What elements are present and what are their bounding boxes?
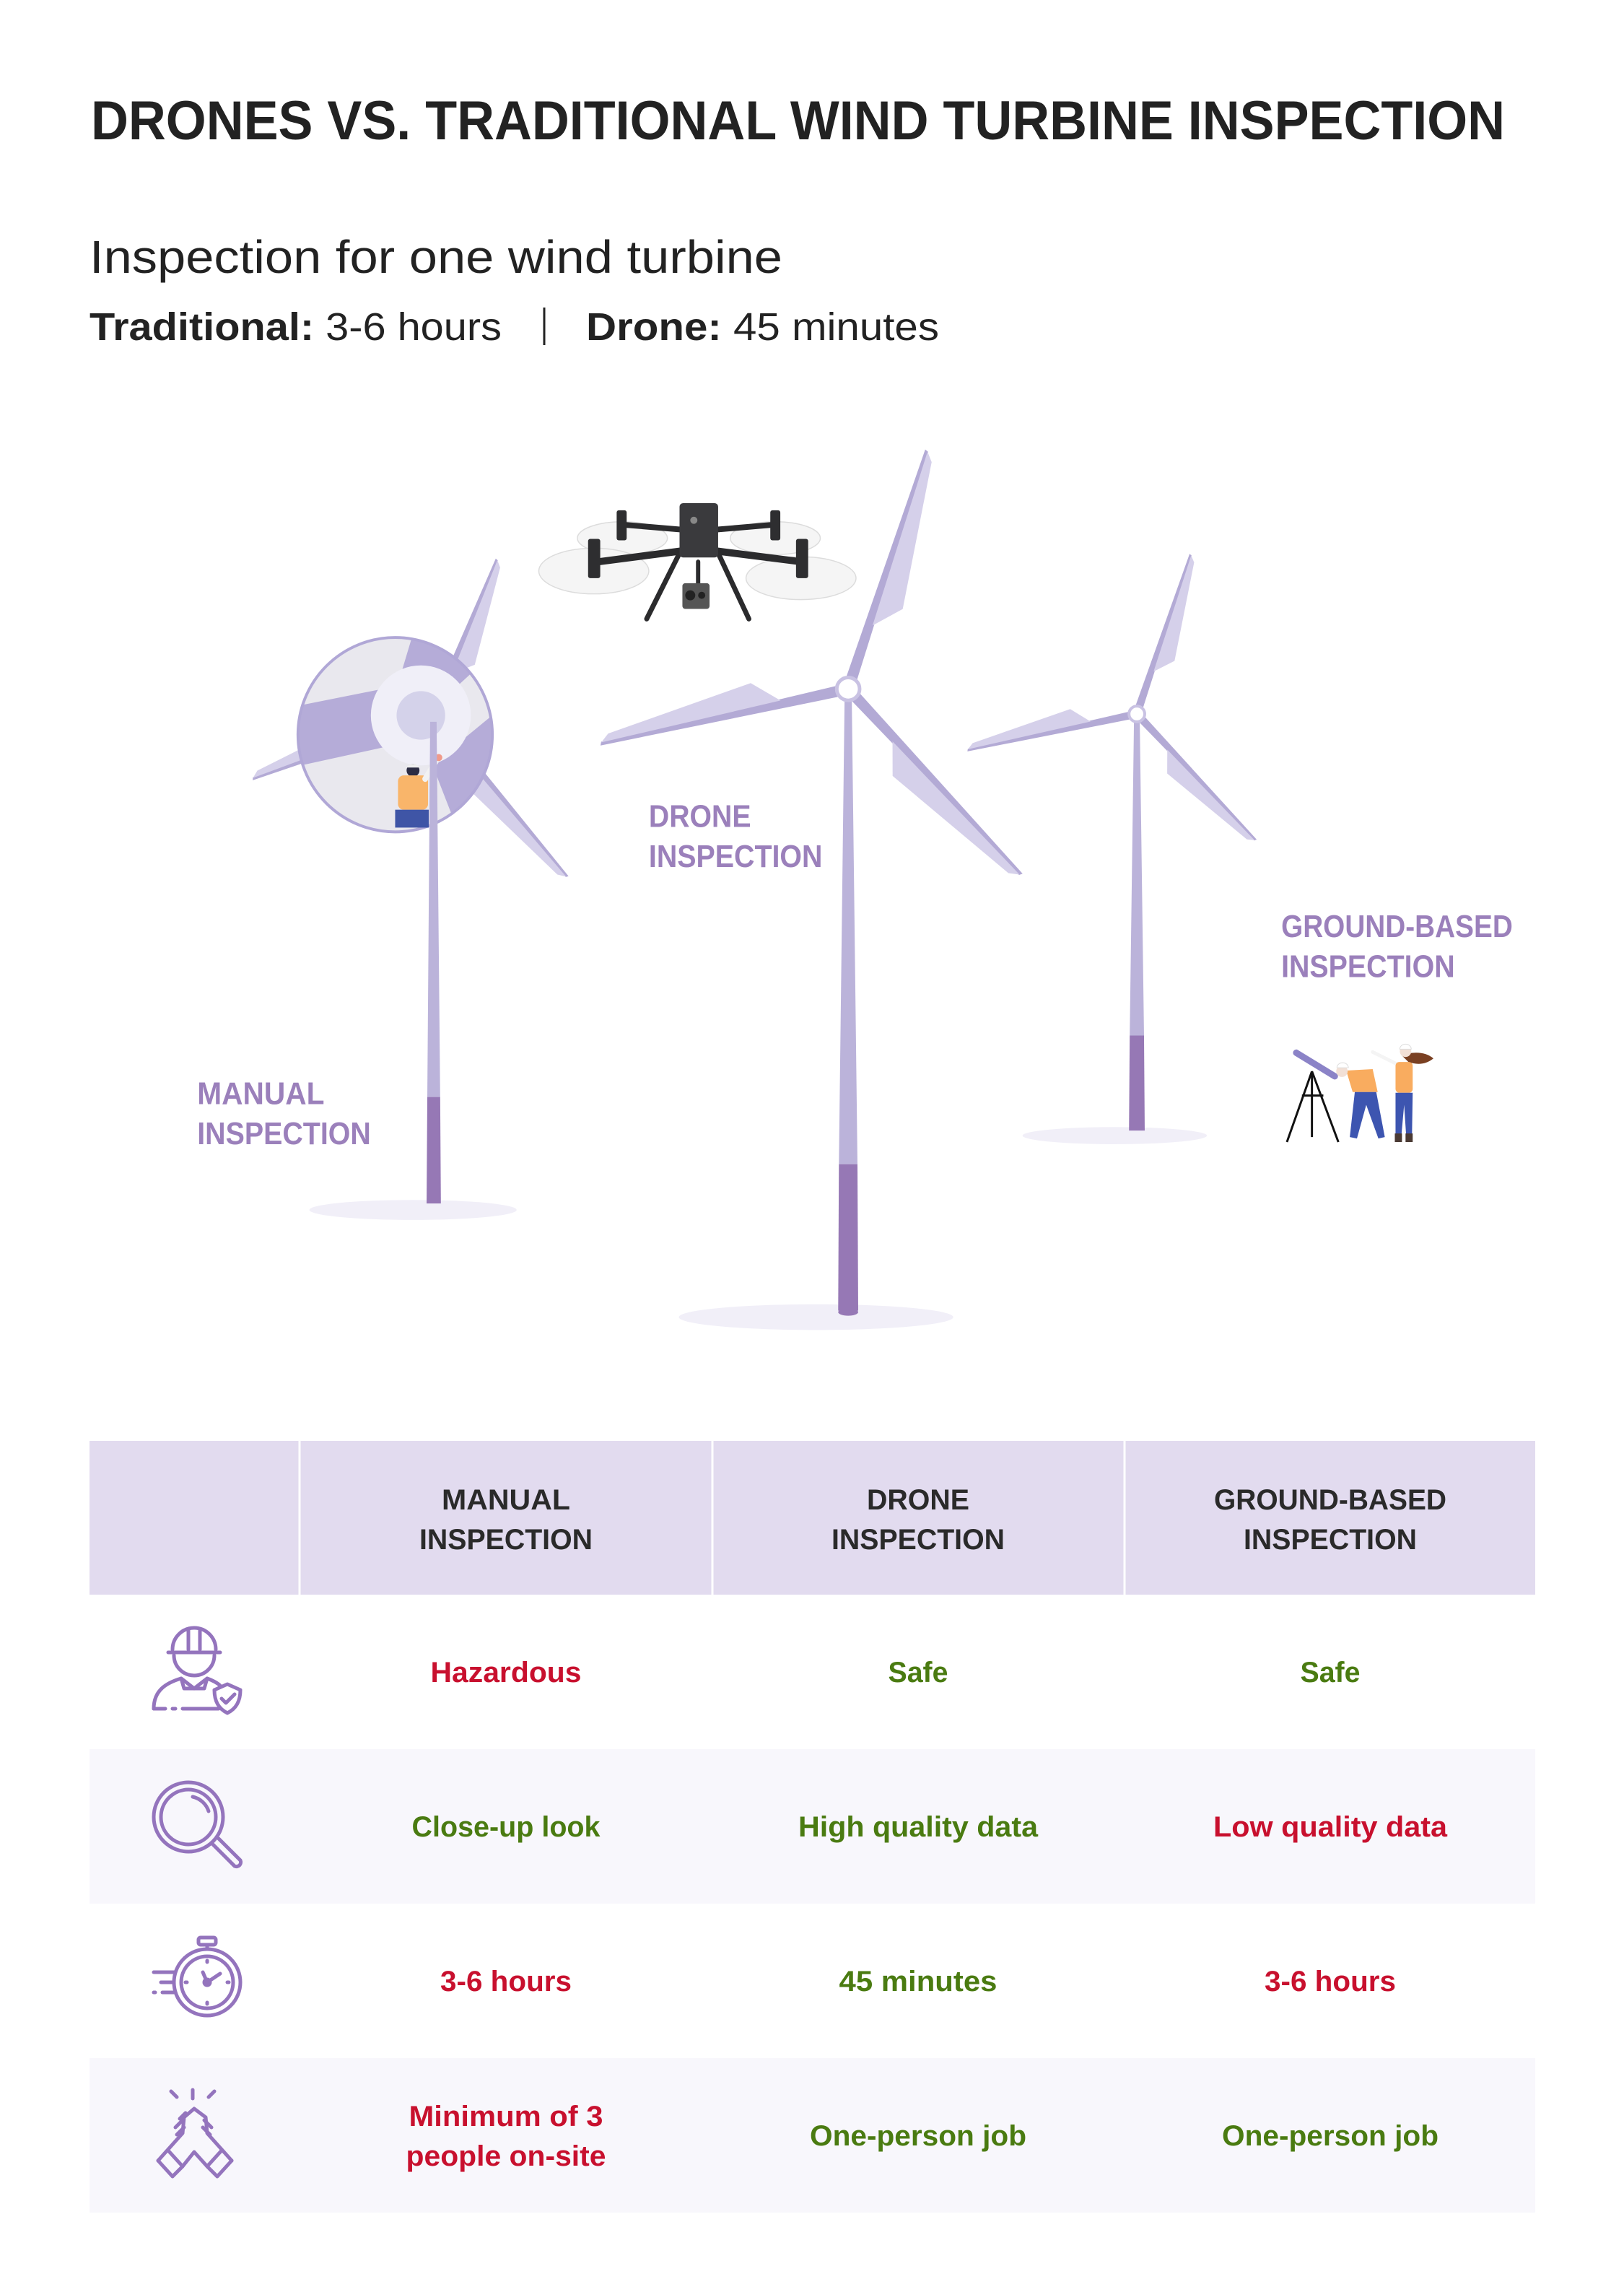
label: drone inspection: INSPECTION [649,840,822,874]
table header: GROUND-BASED [1214,1484,1446,1516]
turbine: drone inspection (middle) [595,448,1026,1316]
row: personnel: Minimum of 3 [409,2101,603,2132]
row: time: 45 minutes [839,1966,997,1997]
time comparison line [90,305,939,349]
label: ground-based inspection: GROUND-BASED [1281,910,1513,944]
row: personnel: One-person job [1222,2120,1439,2152]
row: safety [430,1657,1360,1689]
turbine: ground-based (right) [964,553,1260,1130]
row: data quality: Low quality data [1213,1811,1448,1843]
ground-based inspectors with telescope [1287,1044,1433,1142]
turbine: manual (left) with magnifier [245,557,572,1203]
table header: MANUAL [442,1484,570,1516]
label: ground-based inspection: INSPECTION [1281,949,1455,984]
row: time: 3-6 hours [1265,1966,1396,1997]
row: time [440,1966,1396,1997]
table header: INSPECTION [419,1524,593,1556]
label: drone inspection: DRONE [649,799,751,834]
time comparison line: Drone: 45 minutes [586,305,939,349]
worker figure [395,754,442,827]
table header: INSPECTION [1244,1524,1417,1556]
row: safety: Safe [1301,1657,1360,1689]
row: personnel: people on-site [406,2140,606,2172]
label: manual inspection: INSPECTION [197,1117,371,1151]
row: safety: Hazardous [430,1657,582,1689]
icon: magnifier [154,1782,241,1867]
label: manual inspection: MANUAL [197,1077,324,1112]
row: personnel: One-person job [810,2120,1026,2152]
icon: handshake [158,2090,232,2176]
row: data quality: High quality data [798,1811,1039,1843]
time comparison line: Traditional: 3-6 hours [90,305,502,349]
icon: stopwatch [154,1938,240,2016]
magnifier circle [296,636,494,833]
row: safety: Safe [888,1657,948,1689]
row: personnel [406,2101,1439,2172]
table header: INSPECTION [831,1524,1005,1556]
title: DRONES VS. TRADITIONAL WIND TURBINE INSPECTION [91,90,1505,152]
table header [90,1441,1535,1595]
icon: worker with shield [154,1628,240,1713]
subtitle: Inspection for one wind turbine [90,231,782,283]
row: data quality [411,1811,1448,1843]
turbine shadows [310,1127,1207,1330]
row: time: 3-6 hours [440,1966,572,1997]
illustration: wind turbines [197,448,1513,1330]
drone [538,503,856,619]
row: data quality: Close-up look [411,1811,601,1843]
comparison table [90,1441,1535,2213]
table header: DRONE [867,1484,969,1516]
